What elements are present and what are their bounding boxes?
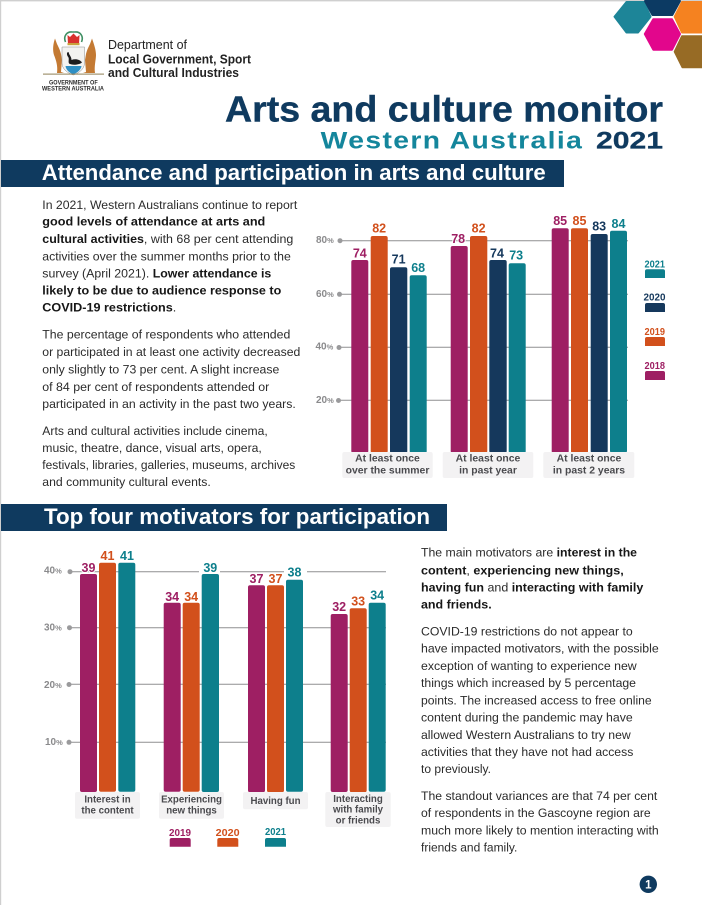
text block: attendance intro bbox=[42, 198, 298, 315]
text block: attendance intro: likely to be due to audience response to bbox=[42, 284, 281, 298]
legend: years: 2019 bbox=[644, 327, 665, 338]
bars: experiencing new things: 34 bbox=[165, 590, 179, 604]
subtitle bbox=[321, 127, 663, 154]
bars: interacting with family or friends: 34 bbox=[370, 588, 384, 602]
legend: years: 2020 bbox=[644, 293, 666, 304]
page number bbox=[640, 876, 657, 893]
category label: interest in the content: the content bbox=[81, 805, 134, 816]
legend: years bbox=[169, 827, 286, 847]
bars: interacting with family or friends: 33 bbox=[351, 595, 365, 609]
category label: having fun bbox=[243, 792, 308, 809]
text block: attendance intro: good levels of attendance at arts and bbox=[42, 215, 265, 229]
bars: having fun bbox=[248, 566, 303, 792]
government of label: GOVERNMENT OF bbox=[49, 81, 98, 87]
category label: interacting with family or friends bbox=[325, 792, 391, 827]
bars: at least once over the summer: 71 bbox=[392, 252, 406, 266]
text block: main motivators: content, experiencing new things, bbox=[421, 563, 624, 577]
text block: attendance intro: survey (April 2021). Lower attendance is bbox=[42, 267, 272, 281]
bar chart: top four motivators bbox=[44, 549, 391, 847]
text block: attendance detail: or participated in at least one activity decreased bbox=[42, 345, 300, 359]
text block: COVID-19 impact: have impacted motivators, with the possible bbox=[421, 642, 659, 656]
text block: main motivators: The main motivators are interest in the bbox=[421, 546, 637, 560]
text block: attendance intro: cultural activities, with 68 per cent attending bbox=[42, 232, 293, 246]
text block: attendance detail: The percentage of respondents who attended bbox=[42, 327, 290, 341]
y axis gridlines and labels: 40% bbox=[316, 342, 334, 352]
y axis gridlines and labels: 60% bbox=[316, 289, 334, 300]
bars: at least once in past year: 78 bbox=[451, 232, 465, 246]
bars: experiencing new things: 39 bbox=[203, 561, 217, 575]
text block: attendance detail: participated in an activity in the past two years. bbox=[42, 397, 296, 411]
bars: interest in the content: 41 bbox=[120, 549, 134, 563]
department name bbox=[108, 38, 252, 80]
category label: interacting with family or friends: or friends bbox=[336, 816, 380, 827]
text block: COVID-19 impact: points. The increased access to free online bbox=[421, 694, 652, 708]
page number: 1 bbox=[645, 879, 652, 891]
subtitle: Western Australia bbox=[321, 127, 583, 154]
category label: past 2 years: in past 2 years bbox=[553, 465, 625, 476]
category label: past 2 years: At least once bbox=[557, 454, 622, 465]
text block: COVID-19 impact: allowed Western Australians to try new bbox=[421, 728, 631, 742]
y axis gridlines and labels: 20% bbox=[44, 680, 62, 691]
bars: experiencing new things bbox=[164, 561, 219, 792]
department name: Local Government, Sport bbox=[108, 52, 252, 66]
section heading: motivators: Top four motivators for participation bbox=[44, 504, 430, 529]
category label: interacting with family or friends: Interacting bbox=[333, 794, 383, 805]
y axis gridlines and labels: 40% bbox=[44, 566, 62, 576]
bars: interest in the content: 39 bbox=[82, 561, 95, 575]
text block: COVID-19 impact bbox=[421, 625, 659, 776]
text block: standout variances: The standout variances are that 74 per cent bbox=[421, 789, 658, 803]
text block: attendance detail bbox=[42, 327, 300, 411]
bars: at least once over the summer: 82 bbox=[372, 222, 386, 236]
text block: attendance intro: COVID-19 restrictions . bbox=[42, 301, 176, 315]
subtitle: 2021 bbox=[596, 127, 663, 154]
western australia label: WESTERN AUSTRALIA bbox=[42, 87, 105, 93]
category label: having fun: Having fun bbox=[250, 796, 301, 807]
category label: over the summer: over the summer bbox=[346, 465, 429, 476]
bar chart: attendance 2018-2021 bbox=[316, 214, 666, 478]
bars: interacting with family or friends: 32 bbox=[332, 600, 346, 614]
department name: and Cultural Industries bbox=[108, 66, 239, 80]
section heading: attendance: Attendance and participation in arts and culture bbox=[42, 160, 546, 185]
category label: interacting with family or friends: with family bbox=[332, 805, 384, 816]
bars: having fun: 37 bbox=[269, 572, 282, 586]
icon: right kangaroo bbox=[83, 38, 96, 73]
text block: attendance detail: of 84 per cent of respondents attended or bbox=[42, 380, 269, 394]
bars: at least once over the summer bbox=[351, 222, 427, 453]
text block: COVID-19 impact: COVID-19 restrictions do not appear to bbox=[421, 625, 633, 639]
bars: at least once in past 2 years: 84 bbox=[612, 217, 625, 231]
category label: interest in the content bbox=[75, 792, 140, 819]
icon: left kangaroo bbox=[53, 38, 64, 73]
bars: at least once in past 2 years bbox=[552, 214, 627, 453]
bars: having fun: 37 bbox=[250, 572, 263, 586]
category label: interest in the content: Interest in bbox=[84, 795, 131, 806]
bars: at least once in past 2 years: 85 bbox=[553, 214, 567, 228]
bars: at least once in past year: 73 bbox=[509, 249, 523, 263]
text block: standout variances: friends and family. bbox=[421, 841, 517, 855]
y axis gridlines and labels: 30% bbox=[44, 622, 62, 634]
text block: activities list: Arts and cultural activities include cinema, bbox=[42, 424, 268, 438]
bars: interest in the content: 41 bbox=[101, 549, 114, 563]
bars: experiencing new things: 34 bbox=[184, 590, 198, 604]
bars: at least once over the summer: 68 bbox=[411, 261, 425, 275]
text block: standout variances bbox=[421, 789, 659, 855]
text block: COVID-19 impact: exception of wanting to experience new bbox=[421, 659, 637, 673]
bars: having fun: 38 bbox=[288, 566, 301, 580]
base line bbox=[43, 74, 104, 75]
category label: past 2 years bbox=[543, 452, 634, 478]
bars: at least once in past 2 years: 83 bbox=[592, 220, 606, 234]
text block: COVID-19 impact: things which increased by 5 percentage bbox=[421, 676, 636, 690]
y axis gridlines and labels bbox=[44, 566, 386, 748]
bars: at least once in past 2 years: 85 bbox=[573, 214, 586, 228]
legend: years: 2019 bbox=[169, 828, 191, 839]
text block: standout variances: much more likely to mention interacting with bbox=[421, 824, 659, 838]
bars: interacting with family or friends bbox=[331, 588, 386, 792]
text block: attendance detail: only slightly to 73 per cent. A slight increase bbox=[42, 362, 280, 376]
icon: shield with swan bbox=[62, 47, 84, 75]
legend: years: 2020 bbox=[216, 828, 240, 839]
category label: experiencing new things bbox=[159, 792, 224, 819]
category label: experiencing new things: new things bbox=[166, 805, 217, 816]
text block: activities list: music, theatre, dance, visual arts, opera, bbox=[42, 441, 262, 455]
y axis gridlines and labels: 20% bbox=[316, 395, 334, 406]
bars: at least once in past year: 74 bbox=[490, 246, 504, 260]
legend: years bbox=[644, 259, 666, 380]
category label: past year: in past year bbox=[459, 465, 517, 476]
text block: main motivators bbox=[421, 546, 644, 612]
text block: main motivators: and friends. bbox=[421, 598, 492, 612]
icon: hexagon cluster bbox=[614, 1, 702, 67]
category label: past year bbox=[443, 452, 533, 478]
text block: main motivators: having fun and interacting with family bbox=[421, 581, 644, 595]
icon: crown bbox=[65, 32, 82, 45]
logo: Government of Western Australia coat of arms bbox=[42, 32, 105, 93]
category label: past year: At least once bbox=[456, 454, 521, 465]
legend: years: 2018 bbox=[644, 361, 665, 372]
text block: COVID-19 impact: to previously. bbox=[421, 762, 491, 776]
text block: activities list: festivals, libraries, galleries, museums, archives bbox=[42, 458, 295, 472]
text block: COVID-19 impact: content during the pandemic may have bbox=[421, 711, 633, 725]
category label: experiencing new things: Experiencing bbox=[161, 795, 222, 806]
text block: activities list bbox=[42, 424, 295, 489]
text block: standout variances: of respondents in the Gascoyne region are bbox=[421, 806, 651, 820]
bars: at least once in past year: 82 bbox=[472, 222, 486, 236]
text block: attendance intro: activities over the summer months prior to the bbox=[42, 250, 291, 264]
title: Arts and culture monitor bbox=[225, 89, 663, 130]
y axis gridlines and labels: 10% bbox=[45, 737, 63, 748]
legend: years: 2021 bbox=[644, 259, 665, 270]
category label: over the summer: At least once bbox=[355, 454, 420, 465]
text block: COVID-19 impact: activities that they have not had access bbox=[421, 745, 633, 759]
category label: over the summer bbox=[342, 452, 433, 478]
bars: interest in the content bbox=[80, 549, 135, 792]
bars: at least once in past year bbox=[451, 222, 526, 453]
text block: activities list: and community cultural events. bbox=[42, 475, 211, 489]
y axis gridlines and labels bbox=[316, 235, 628, 406]
bars: at least once over the summer: 74 bbox=[353, 246, 367, 260]
department name: Department of bbox=[108, 38, 187, 52]
legend: years: 2021 bbox=[265, 827, 286, 838]
y axis gridlines and labels: 80% bbox=[316, 235, 334, 246]
text block: attendance intro: In 2021, Western Australians continue to report bbox=[42, 198, 298, 212]
